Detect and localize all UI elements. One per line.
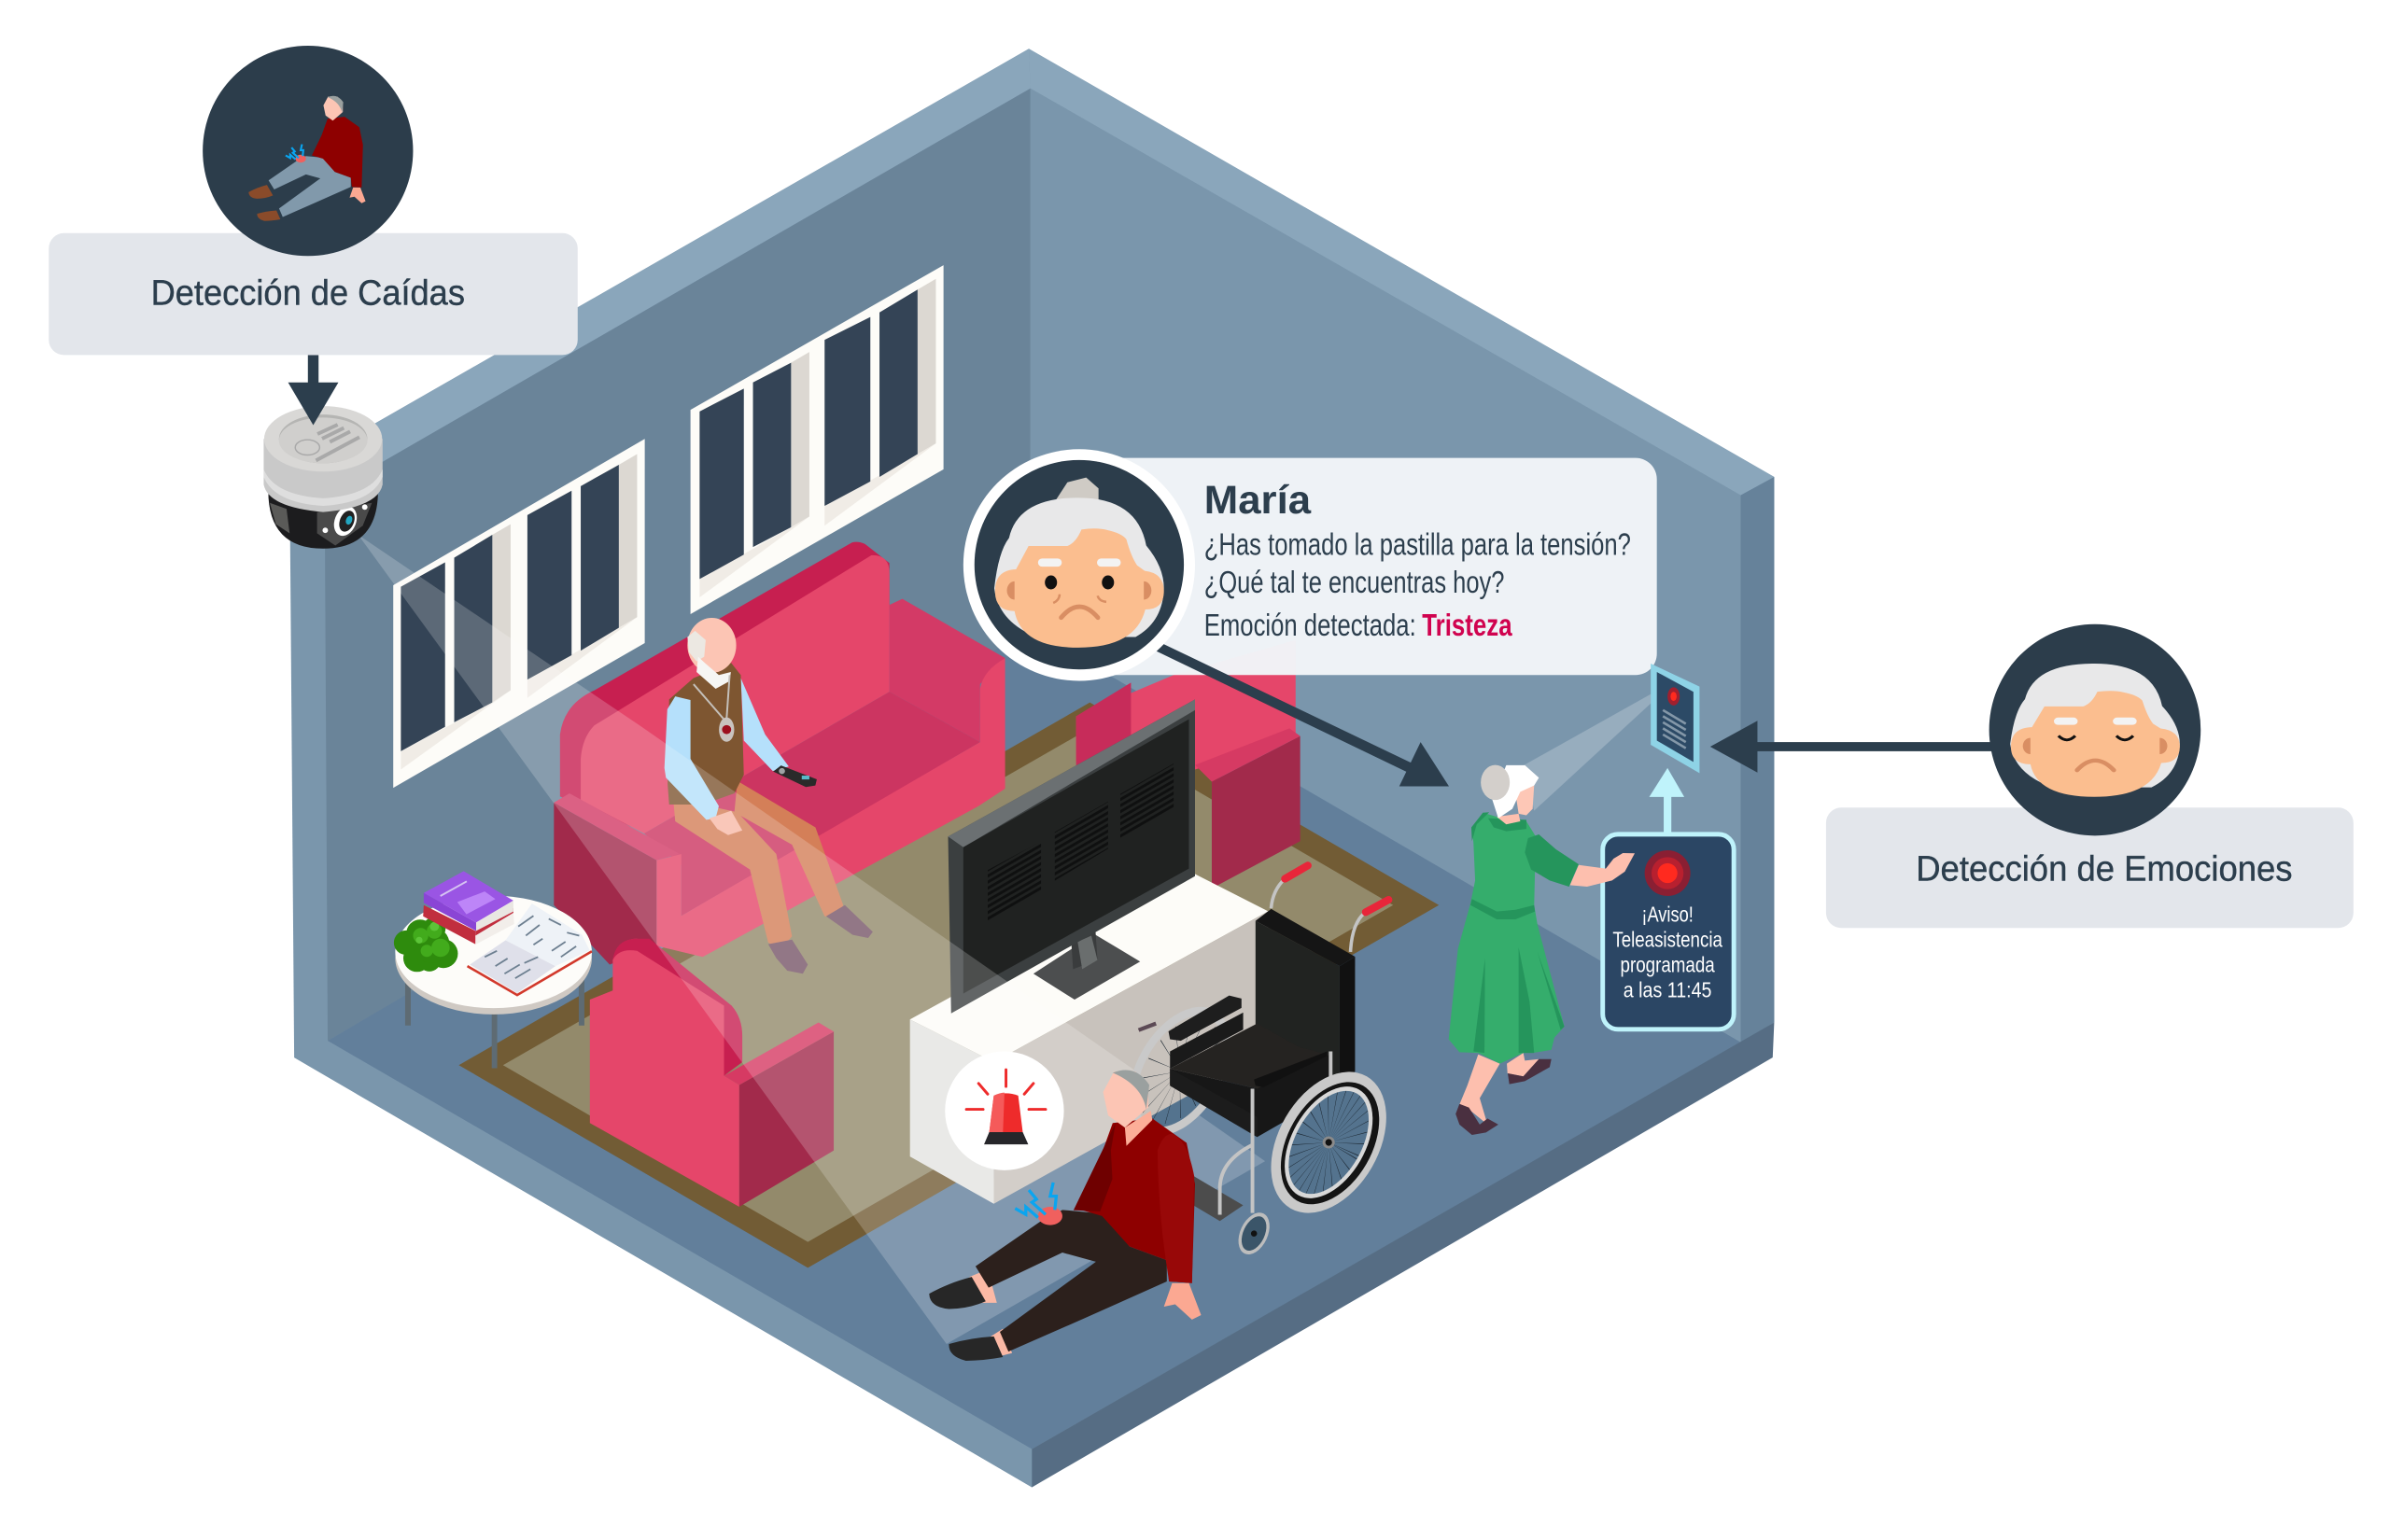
open book	[468, 951, 592, 995]
trousers	[976, 1210, 1167, 1351]
tablet beam	[1525, 679, 1677, 811]
dome	[268, 491, 378, 549]
handles	[1271, 879, 1285, 908]
left arm top	[554, 793, 680, 861]
question 2: ¿Qué tal te encuentras hoy?	[1204, 566, 1504, 600]
sleeve	[1525, 834, 1579, 887]
camera light beam	[358, 535, 1265, 1344]
neck	[1125, 1111, 1152, 1146]
question 1: ¿Has tomado la pastilla para la tensión?	[1204, 527, 1631, 562]
tablet	[1651, 664, 1699, 773]
alert text: a las 11:45	[1624, 978, 1711, 1002]
hand	[710, 811, 742, 835]
alert text: programada	[1621, 953, 1715, 977]
fallen man	[929, 1070, 1202, 1361]
alert panel	[1603, 834, 1734, 1029]
alert text: ¡Aviso!	[1641, 903, 1694, 927]
book text	[485, 916, 579, 978]
shoes	[929, 1277, 986, 1309]
lens	[330, 503, 361, 539]
woman in green dress	[1449, 765, 1579, 1135]
speech bubble: María	[1067, 458, 1657, 675]
arrow: alert to tablet	[1650, 768, 1684, 833]
backrest	[1256, 921, 1340, 1142]
rug	[458, 703, 1439, 1267]
right arm inner	[890, 599, 1005, 742]
label: fall detection	[49, 233, 578, 355]
wheelchair	[1133, 861, 1393, 1254]
left armrest pad	[1169, 996, 1242, 1041]
injured knee	[1038, 1207, 1062, 1225]
head	[687, 618, 737, 673]
sweater	[1076, 1118, 1195, 1283]
pendant	[694, 675, 730, 719]
rear wheel	[1108, 989, 1252, 1154]
caster wheel	[1232, 1208, 1276, 1259]
red alarm light	[1645, 850, 1691, 896]
left arm	[665, 696, 719, 819]
big wheel	[1247, 1052, 1410, 1233]
arrow: emotion detection to tablet	[1710, 721, 1997, 773]
right window	[691, 265, 944, 614]
books	[423, 905, 475, 945]
emotion value: Tristeza	[1422, 609, 1512, 643]
trousers	[674, 781, 843, 949]
camera	[263, 406, 383, 549]
footplate	[1193, 1176, 1244, 1221]
alert text: Teleasistencia	[1612, 928, 1722, 952]
label: emotion detection: Detección de Emociones	[1916, 849, 2293, 889]
television	[949, 699, 1195, 1014]
sofa	[554, 542, 1005, 964]
arrow: label to camera	[288, 355, 338, 426]
dress details	[1470, 899, 1535, 919]
seated man with pendant and remote	[665, 618, 873, 973]
vest	[668, 663, 744, 805]
seat	[1170, 1024, 1328, 1089]
icon: fallen man circle	[203, 46, 413, 256]
neck and head	[1497, 814, 1520, 824]
left window	[393, 439, 645, 788]
woman's hand over alert panel	[1570, 853, 1635, 887]
room: isometric walls and floor	[289, 49, 1774, 1487]
front armchair	[590, 939, 834, 1207]
legs	[1459, 1055, 1500, 1125]
skin ankles	[969, 1269, 997, 1303]
back armchair	[1076, 640, 1300, 891]
seat	[644, 692, 980, 916]
side table with books and plant	[394, 871, 592, 1068]
detected emotion: Emoción detectada:	[1204, 609, 1416, 643]
dress	[1449, 813, 1565, 1064]
right armrest pad	[1254, 1052, 1328, 1087]
name: María	[1204, 478, 1311, 522]
shoes	[768, 905, 873, 973]
pain bolts	[1015, 1183, 1056, 1217]
housing	[263, 439, 383, 512]
front	[656, 658, 1005, 957]
back top strip	[560, 542, 890, 831]
left arm dark side	[554, 803, 656, 964]
tv stand	[910, 869, 1268, 1204]
back face	[581, 555, 890, 833]
right arm	[740, 679, 789, 771]
alarm icon	[945, 1052, 1064, 1170]
arrow: María to woman	[1156, 643, 1449, 786]
head	[1104, 1071, 1148, 1127]
shoes	[1455, 1104, 1498, 1135]
icon: emotion face circle	[1989, 624, 2200, 835]
icon: María face	[963, 449, 1195, 680]
hand	[1164, 1283, 1202, 1320]
plant	[394, 917, 457, 972]
remote	[773, 765, 817, 787]
label: fall detection: Detección de Caídas	[151, 273, 465, 313]
label: emotion detection	[1826, 807, 2354, 928]
armrest panel	[1170, 1013, 1244, 1069]
frame	[1220, 1052, 1330, 1215]
